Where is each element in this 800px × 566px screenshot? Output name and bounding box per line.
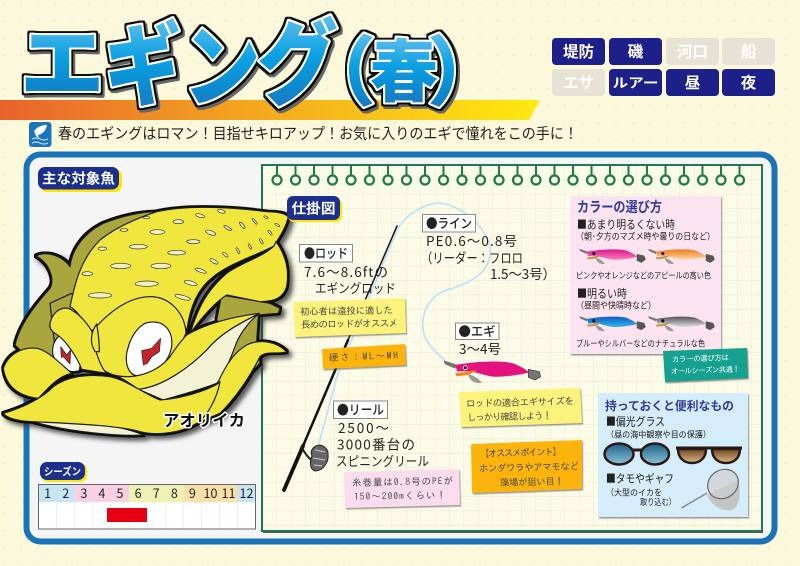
panel: useful items: ■偏光グラス <box>606 414 665 430</box>
tag buttons: 昼 <box>685 71 701 93</box>
note: colour all season: オールシーズン共通！ <box>671 365 740 376</box>
note: recommended point: ホンダワラやアマモなど <box>479 461 580 474</box>
note: egi size <box>459 388 582 427</box>
season chart: 9 <box>189 483 196 502</box>
label: reel: ●リール <box>337 400 384 418</box>
season chart <box>38 483 256 529</box>
heading: rig diagram <box>287 196 342 222</box>
reel spec: 2500～ <box>338 417 389 437</box>
panel: colour selection: ブルーやシルバーなどのナチュラルな色 <box>576 338 705 350</box>
rod spec: 7.6～8.6ftの <box>304 261 388 281</box>
icon: blue lure <box>579 316 646 331</box>
rod spec <box>304 261 396 297</box>
icon: pink egi <box>444 361 541 383</box>
reel spec: スピニングリール <box>336 451 429 470</box>
season chart: 2 <box>62 483 69 502</box>
note: rod tip: 長めのロッドがオススメ <box>301 317 398 330</box>
tag buttons: エサ <box>563 71 594 93</box>
season chart: 12 <box>240 483 253 502</box>
panel: colour selection: （昼間や快晴時など） <box>576 298 656 312</box>
season chart: 6 <box>135 483 142 502</box>
note: rod hardness <box>322 344 406 369</box>
season chart: 11 <box>222 483 235 502</box>
season chart: 3 <box>80 483 87 502</box>
panel: useful items: （昼の海中観察や目の保護） <box>606 428 711 440</box>
panel: colour selection <box>570 196 721 354</box>
heading: rig diagram: 仕掛図 <box>292 198 336 218</box>
title: エ <box>20 0 104 115</box>
heading: season <box>40 462 87 482</box>
icon: brown sunglasses <box>676 448 742 463</box>
panel: useful items <box>598 393 748 517</box>
note: colour all season: カラーの選び方は <box>672 353 730 364</box>
line spec: （リーダー：フロロ <box>421 247 523 267</box>
panel: colour selection: ■あまり明るくない時 <box>577 216 675 232</box>
season chart: 1 <box>44 483 51 502</box>
label: line: ●ライン <box>426 213 472 232</box>
heading: target fish <box>38 167 122 192</box>
panel: notebook <box>262 165 763 533</box>
label: rod: ●ロッド <box>304 243 348 262</box>
note: reel line capacity: 150～200mくらい！ <box>354 490 446 502</box>
title: ） <box>427 11 503 121</box>
note: reel line capacity: 糸巻量は0.8号のPEが <box>352 475 454 488</box>
note: reel line capacity <box>344 469 460 508</box>
icon: pink lure <box>579 249 646 264</box>
illustration: squid <box>3 207 288 435</box>
title: 春 <box>370 17 438 116</box>
panel: useful items: ■タモやギャフ <box>606 470 674 486</box>
note: rod hardness: 硬さ：ML～MH <box>329 351 398 363</box>
line spec <box>421 230 556 283</box>
note: egi size: しっかり確認しよう！ <box>467 411 552 423</box>
note: recommended point <box>471 440 582 493</box>
icon: orange lure <box>648 249 715 264</box>
note: recommended point: 藻場が狙い目！ <box>500 475 564 488</box>
fishing rod <box>284 226 397 490</box>
tag buttons: 磯 <box>628 40 644 62</box>
title: （ <box>300 11 376 121</box>
main blue panel <box>26 154 774 542</box>
title <box>20 0 503 126</box>
tag buttons: ルアー <box>612 72 658 92</box>
note: rod tip: 初心者は遠投に適した <box>300 305 393 317</box>
note: rod tip <box>293 298 406 337</box>
note: recommended point: 【オススメポイント】 <box>480 447 562 459</box>
panel: useful items: 持っておくと便利なもの <box>605 397 734 414</box>
tag buttons: 堤防 <box>563 40 594 62</box>
reel spec: 3000番台の <box>337 434 415 454</box>
panel: useful items: （大型のイカを <box>606 486 662 498</box>
fishing line <box>318 203 490 447</box>
heading: target fish: 主な対象魚 <box>42 168 115 188</box>
egi spec: 3～4号 <box>459 338 501 358</box>
subtitle text: 春のエギングはロマン！目指せキロアップ！お気に入りのエギで憧れをこの手に！ <box>58 122 578 144</box>
note: colour all season <box>663 348 748 382</box>
reel <box>301 445 328 471</box>
reel spec <box>336 417 429 470</box>
squid name label: アオリイカ <box>163 407 245 431</box>
line spec: PE0.6～0.8号 <box>426 230 517 250</box>
icon: blue sunglasses <box>604 444 669 464</box>
rod spec: エギングロッド <box>315 278 396 297</box>
label: egi: ●エギ <box>458 321 496 340</box>
season chart: 4 <box>98 483 105 502</box>
tag buttons <box>552 38 775 96</box>
panel: colour selection: ■明るい時 <box>577 286 627 302</box>
tag buttons: 夜 <box>741 71 757 93</box>
orange title band <box>0 100 540 120</box>
season chart: 7 <box>153 483 160 502</box>
tag buttons: 河口 <box>677 40 708 62</box>
panel: useful items: 取り込む） <box>640 496 676 508</box>
heading: season: シーズン <box>44 464 81 479</box>
icon: silver lure <box>648 316 715 331</box>
panel: colour selection: カラーの選び方 <box>577 197 662 217</box>
tag buttons: 船 <box>741 40 757 62</box>
line spec: 1.5～3号） <box>490 263 556 283</box>
panel: colour selection: （朝･夕方のマズメ時や曇りの日など） <box>576 230 715 242</box>
icon: landing net <box>682 463 744 510</box>
season chart: 8 <box>171 483 178 502</box>
season chart: 10 <box>204 483 217 502</box>
note: egi size: ロッドの適合エギサイズを <box>466 395 574 409</box>
season chart: 5 <box>117 483 124 502</box>
panel: colour selection: ピンクやオレンジなどのアピールの高い色 <box>576 270 711 282</box>
icon: fish and waves <box>29 122 52 147</box>
